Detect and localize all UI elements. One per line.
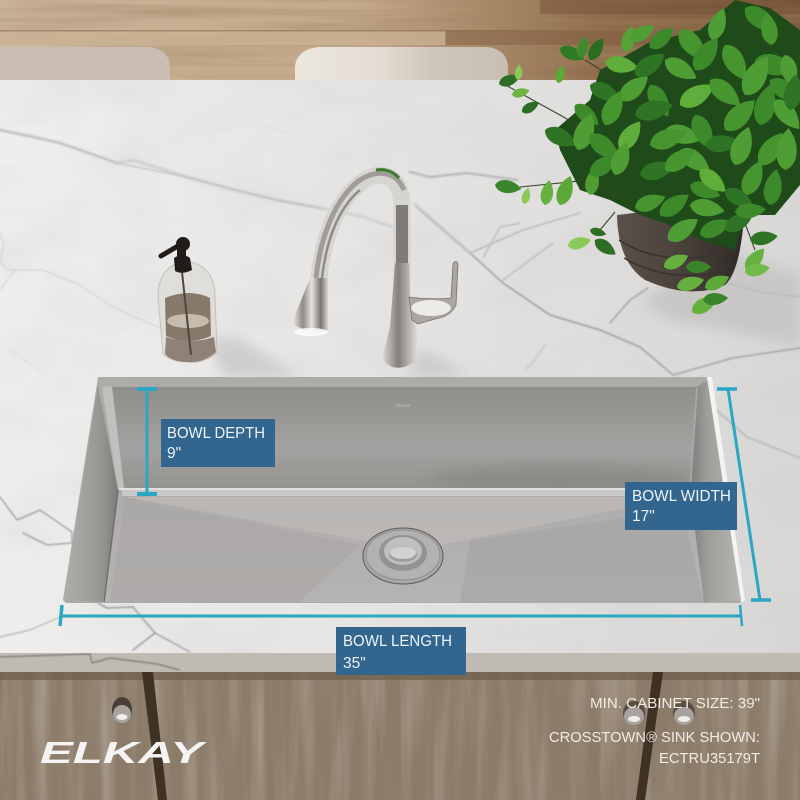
dimension line: bowl length (60, 605, 742, 626)
specification text: ECTRU35179T (659, 751, 760, 767)
label: bowl depth (161, 419, 275, 467)
label: bowl width: BOWL WIDTH (632, 488, 731, 505)
faucet body (383, 263, 417, 368)
right wall (690, 380, 741, 602)
faucet (292, 170, 458, 368)
floor (102, 490, 704, 602)
rear wall (103, 387, 697, 490)
cabinet door gaps (142, 672, 167, 800)
label: bowl length: 35" (343, 655, 366, 672)
label: bowl width: 17" (632, 508, 655, 525)
soap dispenser (158, 237, 217, 362)
cabinet knobs (112, 697, 695, 725)
spray head (292, 278, 328, 331)
cabinet base (0, 672, 800, 800)
label: bowl width (625, 482, 737, 530)
label: bowl depth: BOWL DEPTH (167, 425, 265, 442)
logo: Elkay: ELKAY (40, 735, 208, 770)
specification text (549, 696, 760, 767)
left wall (64, 385, 118, 602)
sink basin (63, 377, 745, 603)
cast shadows on counter (210, 250, 800, 377)
marble countertop (0, 80, 800, 673)
drain (363, 528, 443, 584)
plant foliage (494, 0, 800, 318)
countertop front edge (0, 653, 800, 673)
specification text: CROSSTOWN® SINK SHOWN: (549, 730, 760, 746)
maker mark on rear wall: ELKAY (396, 403, 410, 408)
label: bowl length: BOWL LENGTH (343, 633, 452, 650)
dimension line: bowl depth (137, 389, 157, 494)
specification text: MIN. CABINET SIZE: 39" (590, 696, 760, 712)
rim (63, 377, 743, 603)
label: bowl depth: 9" (167, 445, 181, 462)
chair backs (0, 47, 508, 81)
bottom coved seam (122, 489, 627, 496)
dimension line: bowl width (717, 389, 771, 600)
marble veins (0, 125, 800, 652)
background wood floor (0, 0, 800, 82)
plant pot (617, 200, 745, 291)
label: bowl length (336, 627, 466, 675)
lever handle (409, 262, 458, 324)
gooseneck spout (316, 170, 404, 296)
